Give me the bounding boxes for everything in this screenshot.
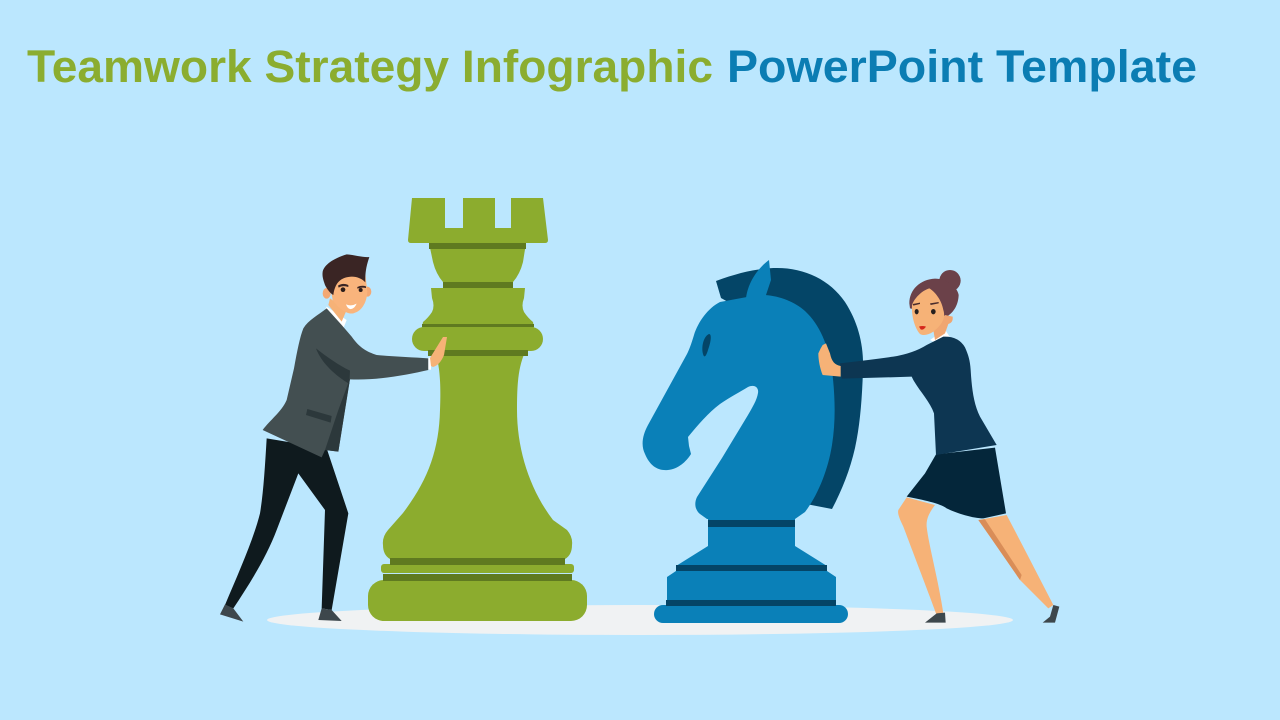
rook chess piece bbox=[368, 198, 587, 621]
woman head bbox=[909, 270, 961, 340]
rook shape bbox=[368, 198, 587, 621]
woman front leg bbox=[898, 497, 943, 615]
knight head bbox=[643, 295, 835, 519]
woman neck and ear bbox=[933, 315, 953, 340]
woman hand bbox=[818, 343, 841, 377]
woman eyes bbox=[915, 309, 919, 314]
woman right eye bbox=[931, 309, 936, 314]
knight mane bbox=[716, 268, 863, 509]
man face bbox=[329, 272, 367, 314]
knight ear bbox=[746, 260, 771, 298]
woman collar bbox=[930, 329, 950, 343]
man eyes bbox=[341, 287, 345, 292]
woman hair bbox=[909, 279, 959, 317]
title bbox=[27, 41, 1197, 92]
man neck bbox=[328, 298, 347, 322]
man jacket bbox=[263, 308, 428, 457]
man cuff bbox=[428, 358, 431, 370]
ground shadow bbox=[267, 605, 1013, 635]
woman jacket bbox=[840, 337, 997, 455]
knight chess piece bbox=[643, 260, 863, 623]
man shoes bbox=[220, 604, 342, 622]
title: blue part: PowerPoint Template bbox=[727, 41, 1197, 92]
woman skirt bbox=[907, 448, 1006, 518]
man head bbox=[322, 254, 371, 322]
knight pedestal bbox=[667, 518, 836, 607]
woman lower body bbox=[818, 329, 1059, 623]
man jacket shadows bbox=[306, 348, 350, 452]
man shirt collar bbox=[325, 307, 347, 328]
man ears bbox=[323, 287, 371, 299]
woman face bbox=[912, 288, 944, 335]
man trousers bbox=[225, 438, 348, 610]
knight eye bbox=[702, 334, 711, 356]
man hand bbox=[430, 337, 447, 367]
man right eye bbox=[359, 288, 363, 292]
man brows bbox=[338, 284, 366, 289]
woman lips bbox=[919, 326, 926, 330]
woman hair bun bbox=[939, 270, 961, 291]
title: green part: Teamwork Strategy Infographic bbox=[27, 41, 713, 92]
rook bands bbox=[383, 243, 572, 581]
man smile bbox=[346, 304, 357, 309]
man hair bbox=[322, 254, 369, 295]
woman back leg shade bbox=[978, 519, 1022, 580]
woman brows bbox=[913, 302, 939, 306]
woman back leg bbox=[978, 515, 1053, 608]
knight base bbox=[654, 605, 848, 623]
man pushing rook bbox=[220, 254, 447, 622]
knight bands bbox=[666, 520, 836, 606]
woman shoes bbox=[925, 605, 1059, 623]
woman pushing knight bbox=[818, 270, 1059, 623]
man body bbox=[220, 307, 431, 622]
